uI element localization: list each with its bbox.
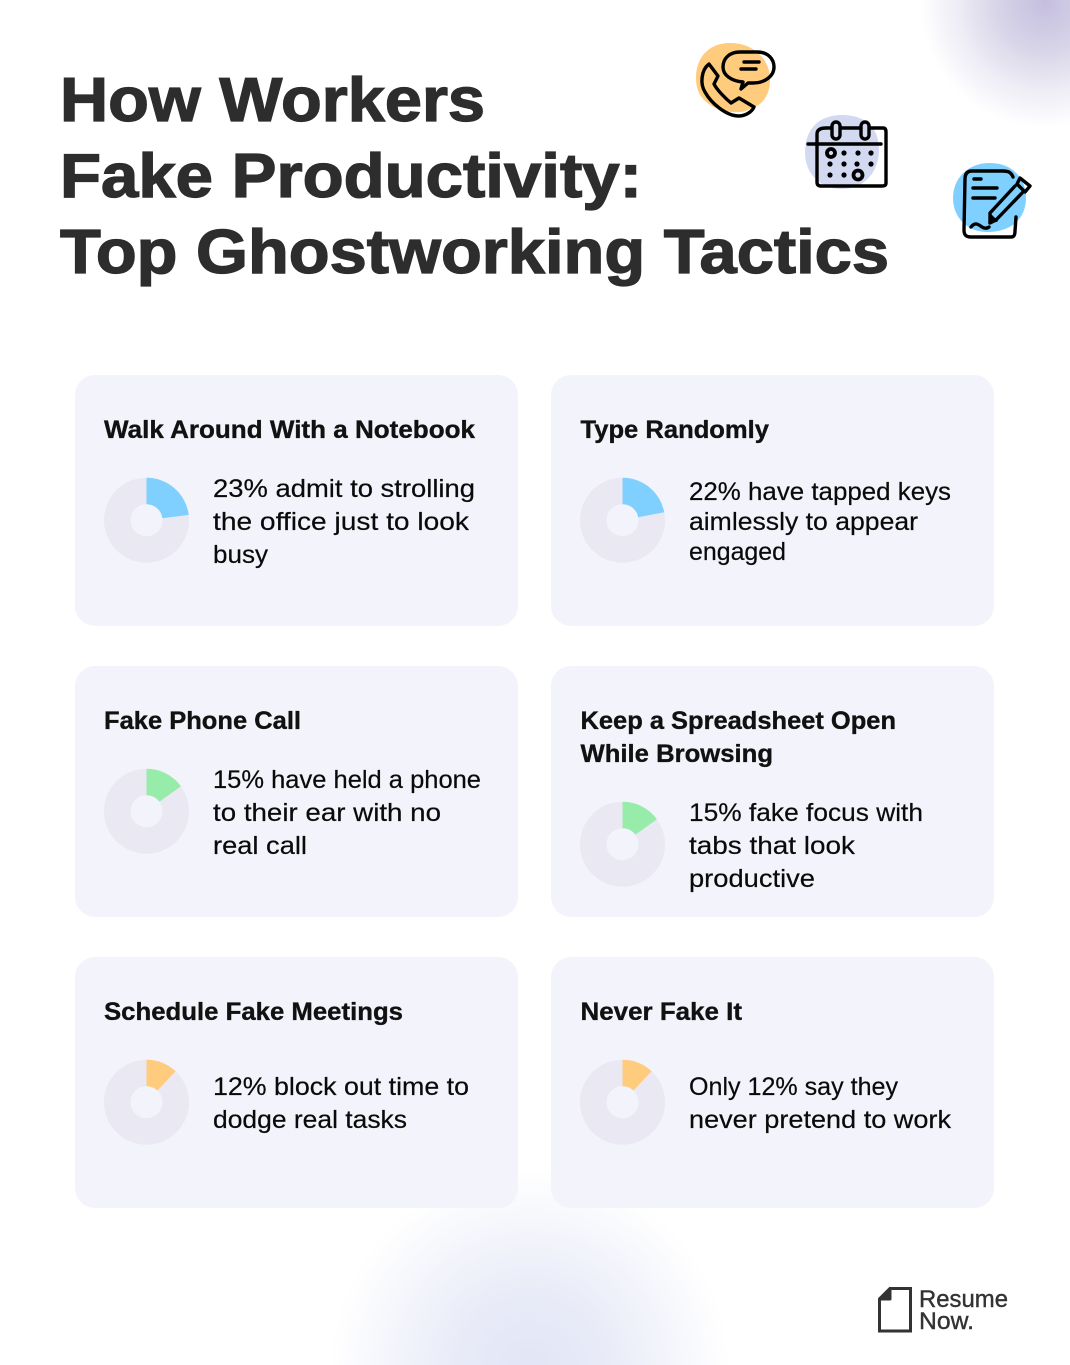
logo: Resume Now: Now. [919, 1308, 974, 1335]
stat text [689, 478, 951, 566]
donut chart: 22% [580, 478, 665, 563]
stat text [689, 799, 923, 893]
panel: schedule fake meetings [75, 957, 518, 1208]
donut chart: 12% [580, 1060, 665, 1145]
panel: keep a spreadsheet open [551, 666, 994, 917]
stat text [689, 1073, 952, 1134]
heading: Never Fake It [580, 998, 743, 1026]
stat text: 12% block out time to [213, 1073, 469, 1101]
donut chart: 12% [104, 1060, 189, 1145]
stat text [213, 1073, 469, 1134]
heading: Keep a Spreadsheet Open [580, 707, 896, 735]
panel: fake phone call [75, 666, 518, 917]
stat text: never pretend to work [689, 1106, 952, 1134]
heading: Type Randomly [580, 416, 769, 444]
stat text [213, 766, 481, 860]
heading: Walk Around With a Notebook [104, 416, 475, 444]
donut chart: 15% [104, 769, 189, 854]
stat text [213, 475, 475, 569]
stat text: engaged [689, 538, 786, 566]
title: Fake Productivity: [60, 142, 642, 211]
stat text: 23% admit to strolling [213, 475, 475, 503]
panel: type randomly [551, 375, 994, 626]
donut chart: 23% [104, 478, 189, 563]
title [60, 66, 889, 287]
heading [580, 707, 896, 768]
stat text: aimlessly to appear [689, 508, 918, 536]
icon: note and pen [953, 163, 1030, 237]
title: How Workers [60, 66, 485, 135]
title: Top Ghostworking Tactics [60, 218, 889, 287]
stat text: 15% fake focus with [689, 799, 923, 827]
logo: Resume Now: Resume [919, 1286, 1008, 1313]
heading: Fake Phone Call [104, 707, 301, 735]
panel: never fake it [551, 957, 994, 1208]
heading: While Browsing [580, 740, 773, 768]
icon: calendar [805, 115, 886, 189]
stat text: the office just to look [213, 508, 470, 536]
stat text: Only 12% say they [689, 1073, 898, 1101]
stat text: to their ear with no [213, 799, 441, 827]
panel: walk around with a notebook [75, 375, 518, 626]
stat text: 22% have tapped keys [689, 478, 951, 506]
stat text: tabs that look [689, 832, 856, 860]
stat text: busy [213, 541, 269, 569]
icon: phone and speech bubble [696, 43, 774, 116]
logo: Resume Now [880, 1286, 1008, 1335]
stat text: dodge real tasks [213, 1106, 407, 1134]
stat text: 15% have held a phone [213, 766, 481, 794]
heading: Schedule Fake Meetings [104, 998, 403, 1026]
stat text: productive [689, 865, 815, 893]
donut chart: 15% [580, 802, 665, 887]
stat text: real call [213, 832, 307, 860]
